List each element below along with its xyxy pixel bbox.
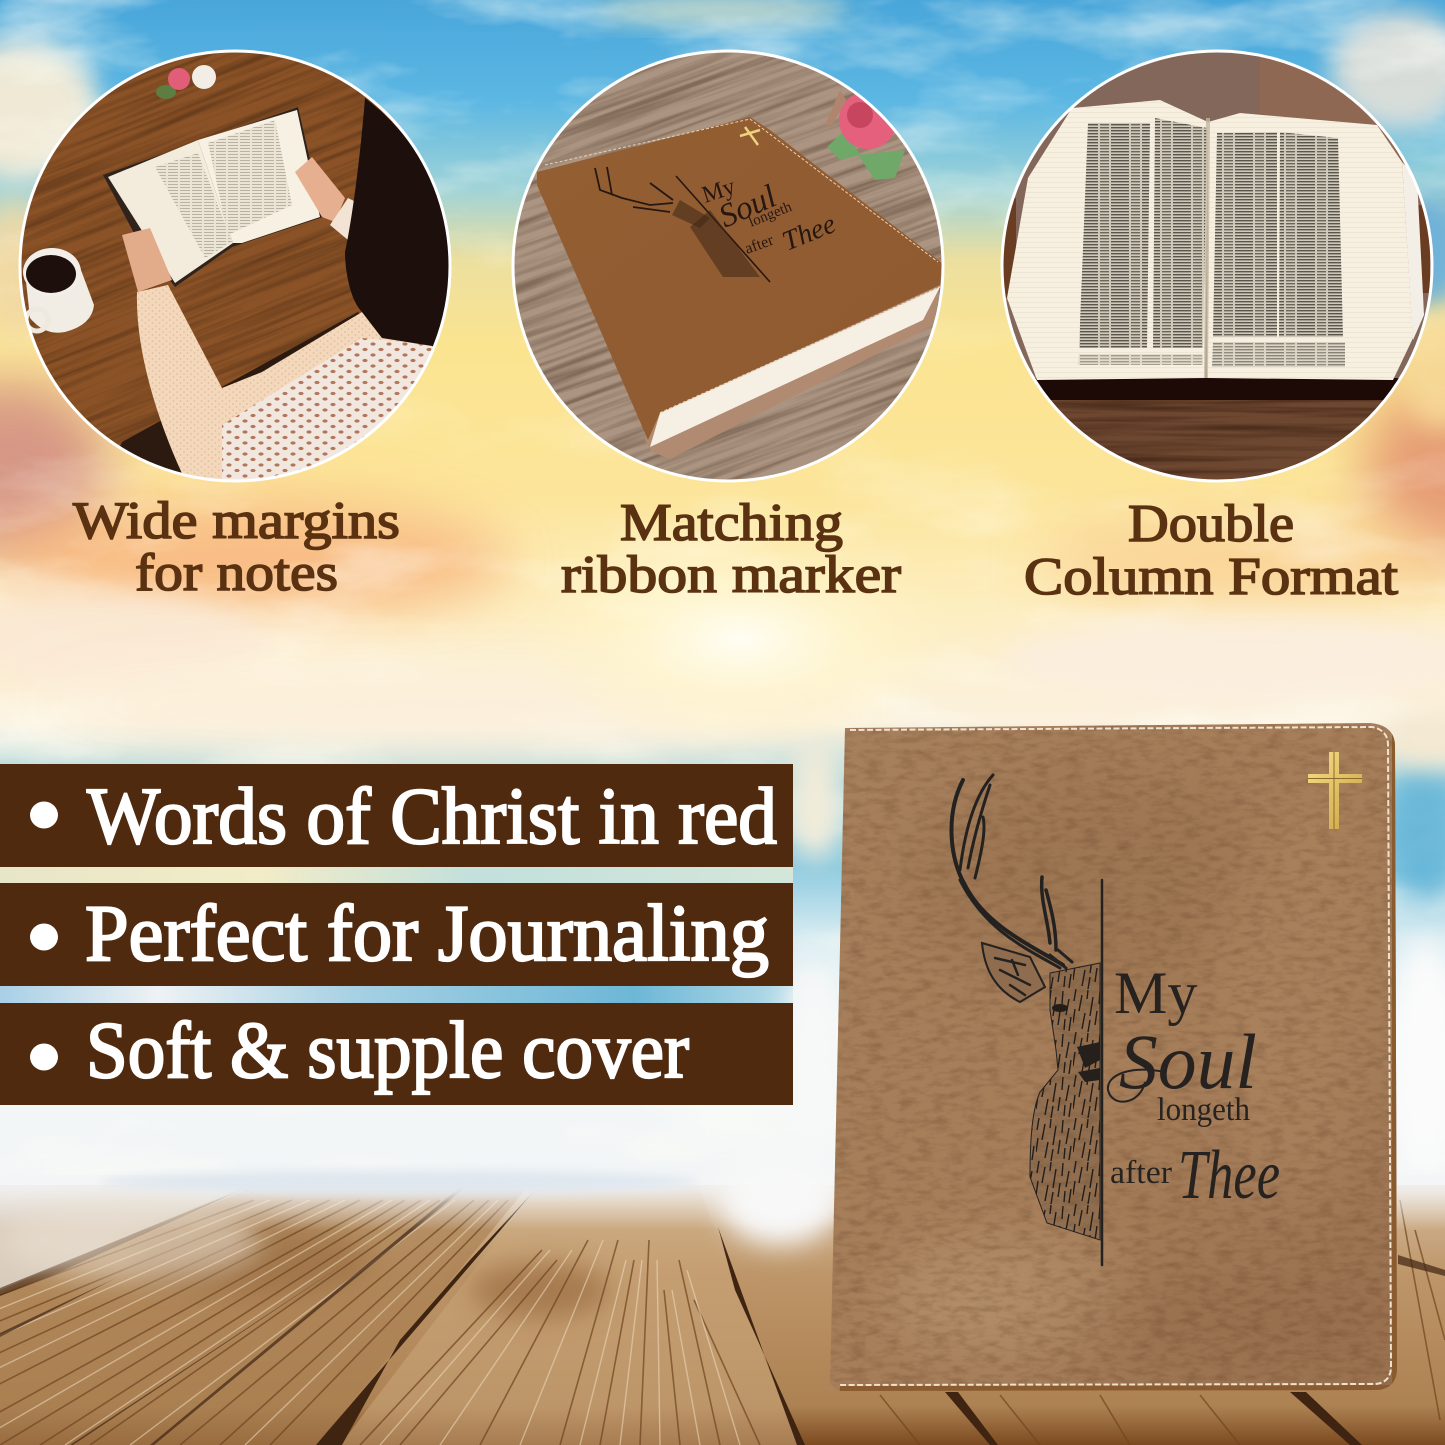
photo circle: engraved brown book: Thee: [778, 208, 840, 257]
feature bar: soft cover: [0, 1003, 793, 1105]
caption: wide margins: for notes: [135, 544, 338, 602]
engraved phrase: after: [1110, 1155, 1172, 1191]
hands: [122, 228, 172, 292]
circle ring 1: [20, 51, 450, 481]
photo circle: engraved brown book: Soul: [714, 179, 782, 235]
lower table: [1035, 378, 1399, 480]
engraved phrase: My: [1114, 960, 1197, 1026]
mug: [23, 248, 94, 333]
antlers: [951, 780, 1063, 965]
book cover: [537, 117, 942, 440]
circle ring 3: [1002, 51, 1432, 481]
icon: gold cross: [740, 127, 760, 145]
plank gaps: [0, 1187, 1445, 1445]
caption: wide margins: Wide margins: [73, 492, 400, 550]
head and neck: [1030, 963, 1100, 1240]
engraved phrase: Soul: [1119, 1018, 1257, 1105]
engraving: stag half portrait: [951, 775, 1102, 1265]
engraved phrase: [1108, 960, 1280, 1214]
photo circle: engraved brown book: after: [743, 232, 777, 258]
caption: ribbon marker: [561, 494, 901, 604]
caption: ribbon marker: ribbon marker: [561, 546, 901, 604]
caption: ribbon marker: Matching: [620, 494, 843, 552]
sweater: [136, 285, 433, 480]
ear: [982, 943, 1045, 1002]
photo circle: engraved brown book: My: [699, 174, 739, 209]
leather bible cover: [825, 720, 1405, 1400]
wooden deck: [0, 1155, 1445, 1445]
engraved phrase: longeth: [1157, 1092, 1250, 1128]
photo circle: engraved brown book: longeth: [747, 199, 795, 231]
engraved phrase: Thee: [1178, 1137, 1280, 1214]
icon: roses: [156, 65, 216, 99]
caption: double column: [1024, 495, 1398, 606]
circle ring 2: [513, 51, 943, 481]
book edge and pages: [645, 283, 940, 459]
hair: [345, 98, 450, 350]
feature bar: journaling: Perfect for Journaling: [85, 890, 769, 978]
cover edges: [1004, 198, 1016, 298]
feature bar: words of Christ: Words of Christ in red: [87, 773, 777, 861]
text columns: [1078, 118, 1345, 367]
photo circle: reading at a table: [22, 52, 448, 480]
caption: double column: Double: [1128, 495, 1294, 553]
left page: [1007, 100, 1208, 380]
right page stack: [1402, 162, 1424, 340]
right page: [1207, 113, 1413, 380]
icon: gold cross: [1308, 752, 1362, 829]
table edge: [120, 312, 359, 473]
feature bar: soft cover: Soft & supple cover: [86, 1007, 689, 1095]
stitching: [840, 727, 1391, 1385]
open book: [103, 107, 323, 287]
caption: double column: Column Format: [1024, 548, 1398, 606]
photo circle: engraved brown book: [514, 52, 942, 480]
engraving: deer and text: [595, 167, 770, 282]
photo circle: open double column page: [1000, 50, 1436, 485]
vertical divider: [1101, 880, 1103, 1265]
caption: wide margins: [73, 492, 400, 602]
icon: rose: [825, 90, 905, 180]
